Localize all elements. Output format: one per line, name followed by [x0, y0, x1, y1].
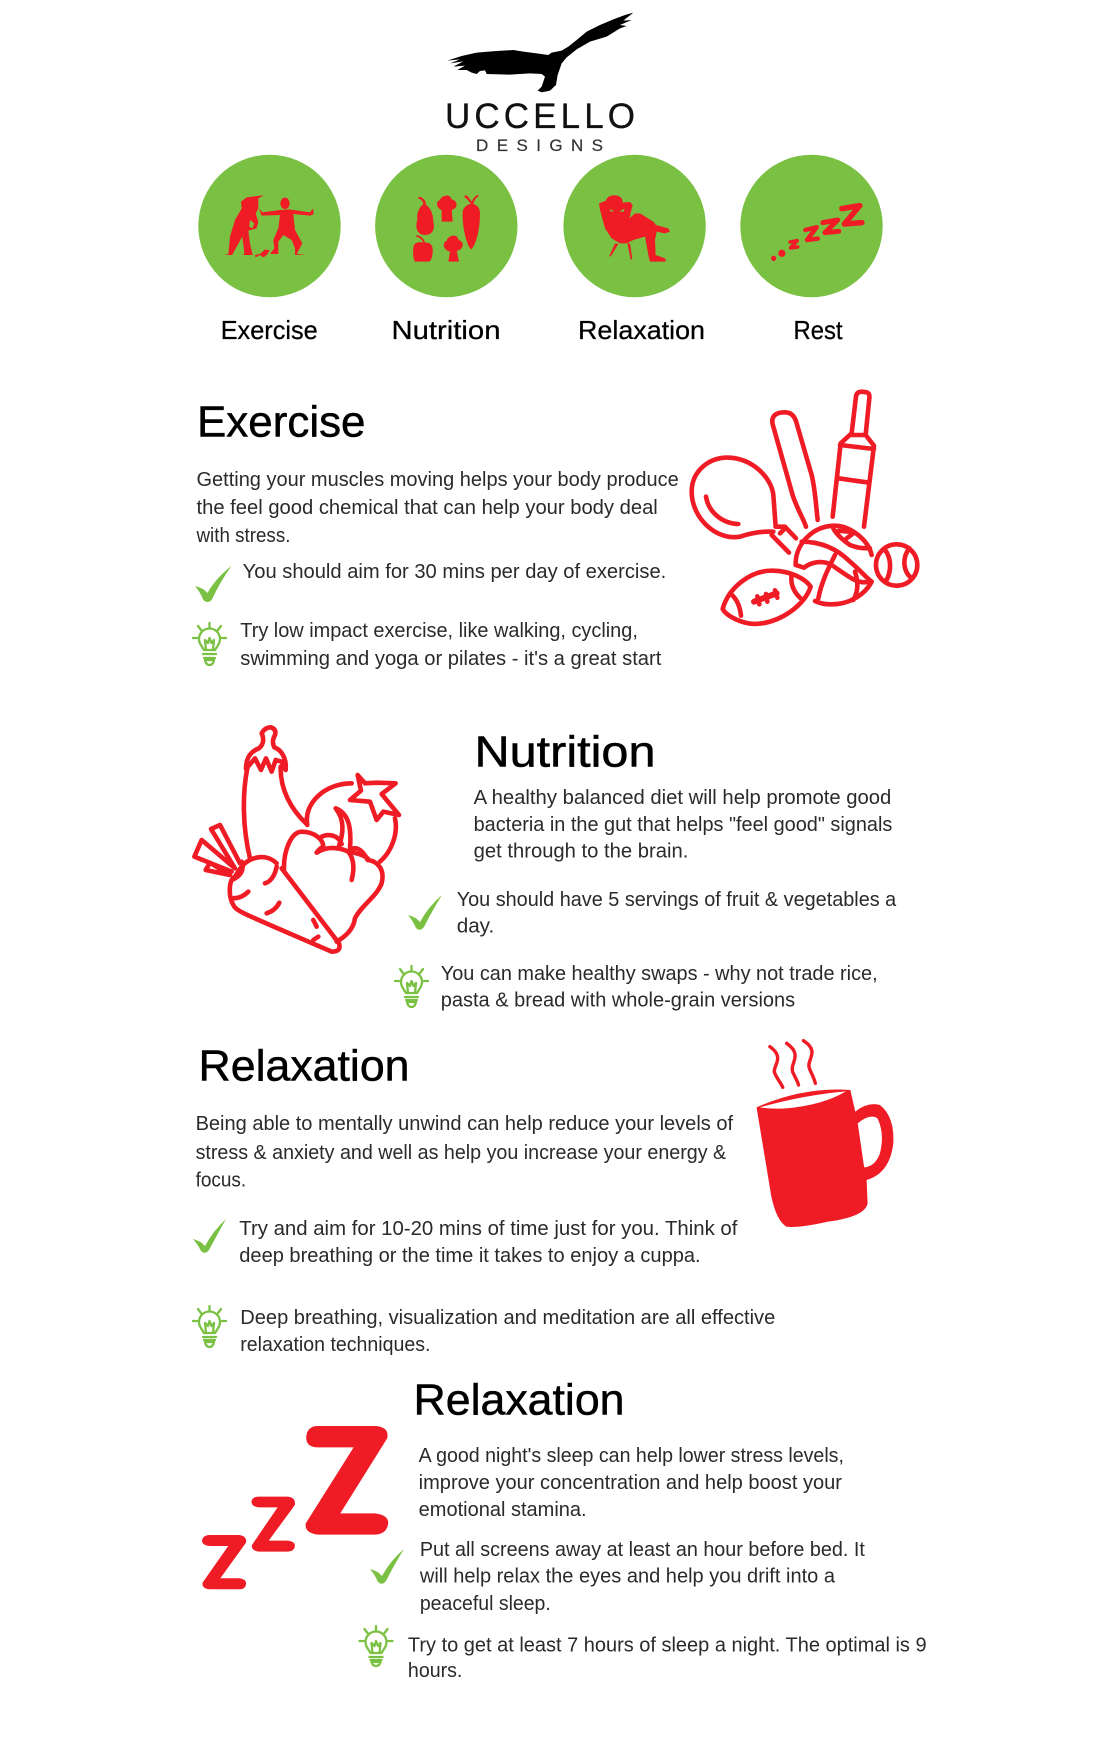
text: exercise tip: swimming and yoga or pilates - it's a great start [240, 648, 662, 670]
icon: check mark [408, 895, 442, 930]
text block: exercise intro: the feel good chemical that can help your body deal [196, 497, 658, 519]
icon: sports equipment outline [692, 392, 917, 624]
text: relaxation tip [240, 1307, 775, 1356]
text block: nutrition intro: bacteria in the gut that helps "feel good" signals [474, 814, 892, 836]
text block: exercise intro: with stress. [196, 525, 290, 547]
text block: relaxation intro: focus. [196, 1170, 246, 1192]
icon: steaming red mug [757, 1041, 893, 1227]
text: exercise tip [240, 620, 662, 670]
category: nutrition [375, 155, 518, 345]
text block: nutrition intro: get through to the brain. [474, 841, 688, 863]
text block: relaxation intro [196, 1113, 734, 1192]
text: relaxation recommendation [239, 1218, 738, 1267]
text block: exercise intro: Getting your muscles moving helps your body produce [196, 469, 679, 491]
text: nutrition tip: pasta & bread with whole-grain versions [441, 990, 795, 1012]
text: exercise tip: Try low impact exercise, like walking, cycling, [240, 620, 638, 642]
text: nutrition tip: You can make healthy swaps - why not trade rice, [441, 963, 878, 985]
icon: red sleeping Z shapes [202, 1426, 388, 1589]
icon: vegetables outline [194, 727, 399, 952]
label: relaxation: Relaxation [578, 315, 705, 345]
text: sleep tip [408, 1635, 927, 1682]
label: exercise: Exercise [221, 315, 318, 345]
circle badge: exercise [198, 155, 341, 297]
text: sleep recommendation: Put all screens away at least an hour before bed. It [420, 1539, 865, 1561]
heading: nutrition: Nutrition [474, 728, 656, 777]
panel: rest [202, 1376, 927, 1682]
icon: check mark [370, 1549, 404, 1584]
icon: light bulb tip [193, 1306, 226, 1347]
text block: sleep intro: A good night's sleep can help lower stress levels, [419, 1445, 844, 1467]
icon: check mark [195, 566, 231, 602]
text: sleep tip: hours. [408, 1660, 462, 1682]
circle badge: nutrition [375, 155, 518, 297]
text block: nutrition intro: A healthy balanced diet will help promote good [474, 787, 891, 809]
circle badge: rest [740, 155, 883, 297]
text block: sleep intro [419, 1445, 844, 1521]
text block: nutrition intro [474, 787, 892, 863]
label: nutrition: Nutrition [392, 315, 500, 345]
text: nutrition recommendation [457, 889, 897, 938]
text: relaxation recommendation: deep breathing or the time it takes to enjoy a cuppa. [239, 1245, 701, 1267]
logo subtitle: DESIGNS [476, 136, 603, 155]
heading: exercise: Exercise [197, 398, 366, 447]
text block: relaxation intro: stress & anxiety and well as help you increase your energy & [196, 1142, 726, 1164]
heading: relaxation (rest section): Relaxation [414, 1376, 624, 1425]
icon: check mark [193, 1219, 226, 1253]
text: sleep tip: Try to get at least 7 hours of sleep a night. The optimal is 9 [408, 1635, 927, 1657]
text: sleep recommendation: peaceful sleep. [420, 1593, 551, 1615]
text: exercise recommendation: You should aim for 30 mins per day of exercise. [243, 561, 666, 583]
category: rest [740, 155, 883, 345]
text block: exercise intro [196, 469, 679, 547]
heading: relaxation: Relaxation [198, 1042, 410, 1091]
text block: sleep intro: improve your concentration and help boost your [419, 1472, 842, 1494]
text block: sleep intro: emotional stamina. [419, 1499, 587, 1521]
panel: relaxation [193, 1041, 893, 1356]
text block: relaxation intro: Being able to mentally unwind can help reduce your levels of [196, 1113, 734, 1135]
icon: light bulb tip [395, 966, 428, 1007]
text: relaxation recommendation: Try and aim for 10-20 mins of time just for you. Think of [239, 1218, 738, 1240]
panel: nutrition [194, 727, 897, 1012]
icon: soaring bird [447, 13, 633, 92]
text: relaxation tip: relaxation techniques. [240, 1334, 430, 1356]
panel: exercise [193, 392, 917, 670]
icon: light bulb tip [193, 623, 226, 665]
text: sleep recommendation: will help relax the eyes and help you drift into a [419, 1566, 836, 1588]
text: relaxation tip: Deep breathing, visualization and meditation are all effective [240, 1307, 775, 1329]
text: nutrition recommendation: You should have 5 servings of fruit & vegetables a [457, 889, 897, 911]
category: exercise [198, 155, 341, 345]
text: nutrition recommendation: day. [457, 916, 494, 938]
logo: Uccello Designs [445, 13, 635, 155]
icon: light bulb tip [360, 1626, 392, 1666]
logo wordmark: UCCELLO [445, 97, 635, 136]
circle badge: relaxation [563, 155, 706, 297]
text: sleep recommendation [419, 1539, 865, 1615]
label: rest: Rest [794, 315, 843, 345]
text: nutrition tip [441, 963, 878, 1012]
category: relaxation [563, 155, 706, 345]
